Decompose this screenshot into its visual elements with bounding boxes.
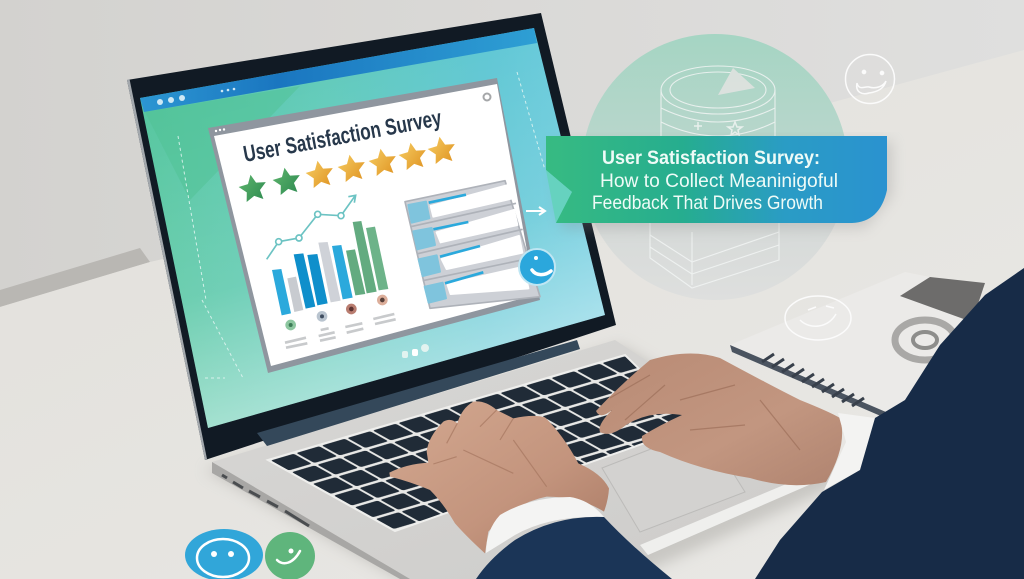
laptop ports	[222, 475, 309, 526]
right shirt cuff	[824, 413, 875, 490]
notebook dark square	[900, 277, 985, 322]
trackpad	[602, 428, 745, 532]
left suit sleeve	[476, 517, 672, 579]
banner title line 1: User Satisfaction Survey:	[602, 148, 820, 169]
list row 2	[413, 210, 523, 254]
wall skirting band	[0, 248, 150, 307]
window heading: User Satisfaction Survey	[241, 104, 444, 167]
laptop	[127, 13, 825, 579]
icon: blue smiley bottom	[185, 529, 263, 579]
right suit sleeve	[755, 268, 1024, 579]
icon: database cylinder outline	[650, 66, 779, 288]
panel: survey window	[208, 78, 540, 373]
bar chart	[267, 195, 396, 348]
screen dashed guides	[178, 72, 545, 378]
list row 4	[425, 267, 528, 303]
list row 3	[419, 236, 530, 281]
decorative data circle	[582, 34, 848, 300]
list row 1	[408, 185, 516, 227]
arrow to banner	[526, 207, 545, 215]
icon: smiley outline on notebook	[785, 296, 851, 340]
star rating	[237, 134, 458, 203]
laptop base	[212, 340, 825, 579]
keyboard	[268, 355, 696, 531]
left hand	[389, 401, 609, 553]
icon: blue smiley on screen	[519, 249, 555, 285]
banner title line 2: How to Collect Meaninigoful	[600, 170, 838, 192]
window control dots	[215, 128, 225, 132]
display	[140, 28, 605, 428]
notebook	[730, 272, 985, 420]
trend line	[267, 195, 356, 259]
banner	[546, 136, 892, 229]
feedback list	[405, 181, 540, 308]
icon: smiley outline top right	[846, 54, 894, 104]
chart avatars	[285, 295, 388, 330]
notebook spiral binding	[762, 354, 864, 406]
notebook circular sketch	[895, 320, 955, 360]
laptop screen lid	[127, 13, 616, 460]
left shirt cuff	[486, 497, 604, 553]
browser top bar	[140, 28, 537, 112]
icon: green smiley bottom	[265, 532, 315, 579]
right hand	[596, 353, 842, 485]
screen pagination dots	[402, 344, 429, 358]
chart labels	[285, 314, 396, 348]
hinge	[257, 340, 580, 446]
banner title line 3: Feedback That Drives Growth	[592, 192, 823, 214]
window close icon	[484, 94, 490, 100]
laptop soft shadow	[205, 345, 850, 579]
